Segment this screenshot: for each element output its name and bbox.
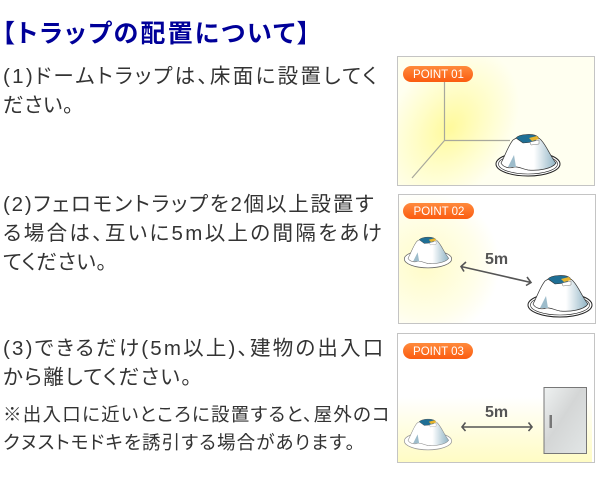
badge: point 02 <box>403 203 474 219</box>
icon: dome trap <box>496 134 560 176</box>
text block: step 2: (2)フェロモントラップを2個以上設置す <box>3 193 376 216</box>
label: 5m distance: 5m <box>485 404 508 421</box>
badge: point 03 <box>403 343 473 359</box>
text block: step 2 <box>3 193 384 274</box>
badge: point 01 <box>403 66 473 82</box>
text block: step 1 <box>3 65 379 117</box>
badge: point 01: POINT 01 <box>413 69 464 81</box>
badge: point 02: POINT 02 <box>414 206 464 218</box>
icon: dome trap, left <box>404 237 452 268</box>
arrow: distance between traps <box>461 262 531 286</box>
label: 5m distance: 5m <box>485 251 508 268</box>
icon: door <box>544 388 586 454</box>
text block: note <box>3 404 391 453</box>
text block: step 1: (1)ドームトラップは、床面に設置してく <box>3 65 379 88</box>
panel: point 02 <box>398 194 596 324</box>
text block: note: ※出入口に近いところに設置すると、屋外のコ <box>3 404 391 425</box>
room corner lines <box>412 82 510 178</box>
text block: step 3: (3)できるだけ(5m以上)、建物の出入口 <box>3 337 386 360</box>
arrow: distance to door <box>462 422 532 431</box>
text block: step 3: から離してください。 <box>3 366 193 389</box>
title: 【トラップの配置について】 <box>2 20 312 48</box>
icon: dome trap, right <box>528 275 592 317</box>
text block: step 3 <box>3 337 386 389</box>
badge: point 03: POINT 03 <box>413 346 464 358</box>
icon: dome trap <box>404 419 452 450</box>
text block: step 2: る場合は、互いに5m以上の間隔をあけ <box>3 222 384 245</box>
text block: note: クヌストモドキを誘引する場合があります。 <box>3 432 356 453</box>
panel: point 03 <box>398 334 594 462</box>
text block: step 1: ださい。 <box>3 94 74 117</box>
text block: step 2: てください。 <box>3 251 107 274</box>
panel: point 01 <box>398 56 594 186</box>
